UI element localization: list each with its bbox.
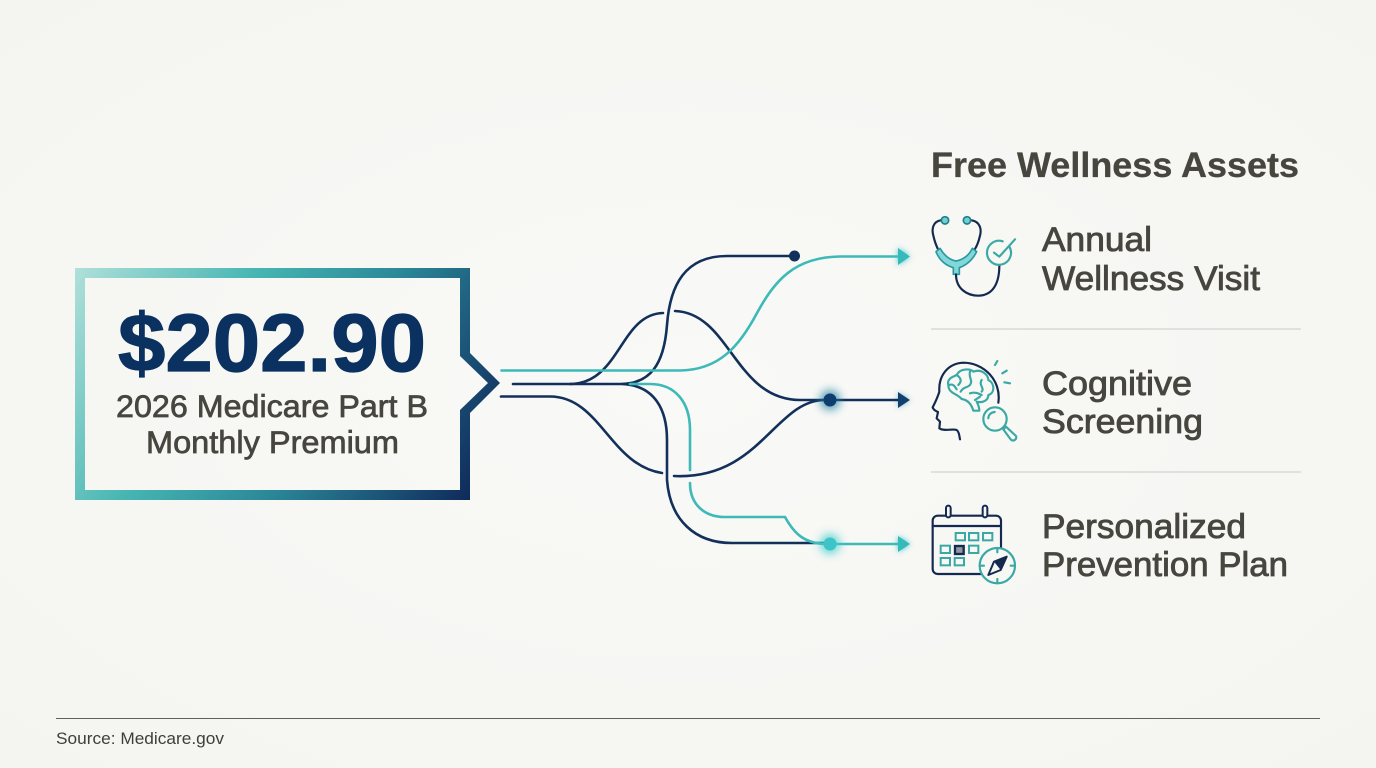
path: teal to annual visit bbox=[502, 256, 900, 370]
icon: head with brain and magnifier bbox=[933, 361, 1016, 440]
label: annual wellness visit: Wellness Visit bbox=[1042, 260, 1260, 298]
label: annual wellness visit bbox=[1042, 221, 1260, 298]
path: navy to prevention node bbox=[623, 384, 825, 543]
path: navy lower branch to cognitive node bbox=[501, 396, 825, 476]
panel: premium callout bbox=[75, 268, 500, 500]
label: cognitive screening: Screening bbox=[1042, 403, 1203, 441]
arrow: prevention plan bbox=[830, 536, 910, 552]
arrow: wellness visit bbox=[898, 248, 910, 265]
label: cognitive screening bbox=[1042, 365, 1203, 441]
icon: stethoscope with check bbox=[933, 217, 1015, 296]
arrow: cognitive screening bbox=[830, 392, 910, 408]
path: navy to top dot bbox=[513, 256, 794, 384]
node: prevention bbox=[820, 534, 840, 554]
heading: free wellness assets: Free Wellness Assets bbox=[931, 146, 1299, 185]
source note: Source: Medicare.gov bbox=[56, 729, 224, 748]
premium description: Monthly Premium bbox=[146, 424, 399, 460]
path: navy upper branch to cognitive node bbox=[570, 311, 830, 400]
label: annual wellness visit: Annual bbox=[1042, 221, 1152, 259]
label: personalized prevention plan: Personalized bbox=[1042, 508, 1246, 546]
label: cognitive screening: Cognitive bbox=[1042, 365, 1192, 403]
premium description bbox=[116, 388, 428, 460]
node: cognitive bbox=[820, 390, 840, 410]
callout frame bbox=[75, 268, 500, 500]
premium description: 2026 Medicare Part B bbox=[116, 388, 428, 424]
path: teal to prevention node bbox=[630, 384, 825, 544]
premium amount: $202.90 bbox=[118, 298, 426, 389]
label: personalized prevention plan bbox=[1042, 508, 1288, 584]
node: top dot bbox=[789, 250, 800, 262]
label: personalized prevention plan: Prevention Plan bbox=[1042, 546, 1288, 584]
icon: calendar with compass bbox=[933, 506, 1015, 583]
diagram: branching pathways bbox=[501, 248, 910, 554]
